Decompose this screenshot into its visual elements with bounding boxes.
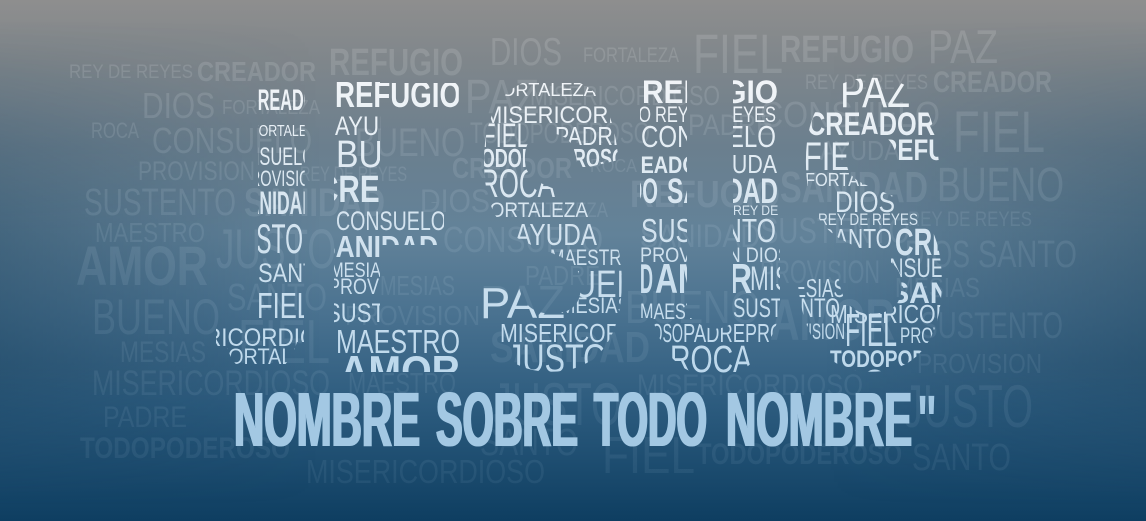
background faint word cloud: TODOPODEROSO — [697, 438, 902, 471]
second letter S words: FIEL — [803, 135, 868, 179]
background faint word cloud: BUENO — [92, 289, 220, 345]
second letter S words: FIEL — [845, 304, 897, 356]
background faint word cloud: CONSUELO — [443, 219, 603, 260]
background faint word cloud: MAESTRO — [348, 368, 456, 400]
letter U words: SUSTENTO — [733, 293, 833, 323]
JESUS letters filled with words — [216, 78, 942, 372]
background faint word cloud: REY DE REYES — [805, 71, 928, 94]
letter U words: PROVISION DIOS — [640, 244, 790, 267]
background faint word cloud: REY DE REYES — [300, 163, 407, 186]
background faint word cloud: SUSTENTO — [84, 182, 236, 224]
letter U words: CONSUELO — [641, 119, 776, 154]
title: NOMBRE SOBRE TODO NOMBRE: TODO — [594, 377, 707, 463]
background faint word cloud: MISERICORDIOSO — [637, 369, 863, 402]
second letter S words: PROVISION — [770, 319, 845, 344]
background faint word cloud: JUSTO — [492, 371, 622, 438]
letter U words: ROCA — [670, 339, 752, 381]
background faint word cloud: REY DE REYES — [908, 208, 1032, 231]
background faint word cloud: PROVISION — [138, 156, 255, 186]
title: NOMBRE SOBRE TODO NOMBRE — [234, 377, 937, 463]
background faint word cloud: DIOS — [142, 85, 215, 126]
letter U words: CONSUELO — [560, 102, 651, 127]
background faint word cloud: JUSTO — [216, 217, 336, 280]
letter S words: MAESTRO — [550, 245, 635, 270]
background faint word cloud: PROVISION — [760, 254, 880, 290]
background faint word cloud: SANTO — [480, 422, 578, 464]
letter U words: PADRE — [683, 318, 745, 348]
background faint word cloud: REFUGIO — [329, 42, 463, 84]
letter U words: SANIDAD — [667, 172, 778, 211]
background faint word cloud: AMOR — [76, 234, 208, 297]
letter S words: MISERICORDIOSO — [500, 318, 690, 348]
background faint word cloud: CREADOR — [933, 66, 1052, 99]
background faint word cloud: FIEL — [238, 308, 330, 377]
letter J words: PROVISION — [240, 166, 321, 191]
letter E words: AYUDA — [335, 111, 410, 141]
second letter S words: CONSUELO — [860, 253, 970, 283]
letter E words: REFUGIO — [335, 74, 461, 115]
letter E words: MESIAS — [330, 259, 392, 282]
letter U words: MAESTRO — [640, 299, 720, 324]
letter S words: JUSTO — [507, 337, 607, 381]
background faint word cloud: MESIAS — [120, 336, 206, 369]
letter S words: ROCA — [480, 162, 555, 206]
letter S words — [484, 83, 622, 372]
letter E words: SUSTENTO — [326, 298, 446, 328]
background faint word cloud: FIEL — [602, 427, 695, 485]
letter S words: MISERICORDIOSO — [484, 102, 679, 129]
background faint word cloud — [69, 20, 1077, 490]
letter E words: PROVISION — [328, 274, 428, 299]
letter J words: FIEL — [257, 285, 311, 326]
background faint word cloud: PROVISION — [345, 300, 480, 331]
second letter S words: CREADOR — [807, 106, 935, 142]
letter S words: FORTALEZA — [478, 199, 588, 222]
letter S words: BUENO — [553, 264, 663, 306]
title: NOMBRE SOBRE TODO NOMBRE: SOBRE — [436, 377, 578, 463]
background faint word cloud: FIEL — [693, 22, 783, 85]
second letter S words: MESIAS — [780, 273, 845, 303]
background faint word cloud: SANTO — [912, 437, 1011, 479]
background faint word cloud: CONSUELO — [760, 94, 940, 135]
background faint word cloud: CREADOR — [197, 56, 316, 87]
letter J words: CONSUELO — [223, 143, 315, 171]
background faint word cloud: SUSTENTO — [920, 305, 1063, 346]
letter U words: PROVISION — [745, 318, 845, 348]
letter S words: TODOPODEROSO — [470, 143, 626, 173]
background faint word cloud: MESIAS — [895, 272, 980, 303]
letter U words: MISERICORDIOSO — [750, 260, 950, 298]
background faint word cloud: MAESTRO — [95, 217, 205, 248]
letter U words — [640, 80, 780, 372]
letter U words: REFUGIO — [642, 74, 778, 110]
letter J words: FORTALEZA — [251, 123, 323, 140]
background faint word cloud: FORTALEZA — [583, 44, 679, 67]
second letter S words — [798, 78, 942, 372]
second letter S words: DIOS — [835, 186, 895, 219]
letter U words: AYUDA — [705, 149, 778, 179]
background faint word cloud: SANTO — [227, 277, 327, 319]
second letter S words: REFUGIO — [880, 134, 990, 167]
background faint word cloud: ROCA — [590, 156, 637, 176]
background faint word cloud: DIOS — [420, 183, 490, 219]
second letter S words: PAZ — [840, 66, 910, 117]
second letter S words: CREADOR — [895, 222, 1025, 264]
background faint word cloud: FORTALEZA — [222, 97, 321, 119]
second letter S words: FORTALEZA — [805, 170, 900, 190]
letter S words: MESIAS — [560, 293, 630, 318]
second letter S words: ROCA — [840, 362, 930, 403]
letter J words — [216, 90, 305, 364]
letter U words: CREADOR — [612, 152, 712, 179]
letter S words: AYUDA — [515, 217, 597, 252]
background faint word cloud: DIOS — [490, 31, 562, 74]
background faint word cloud: JUSTO — [903, 373, 1033, 440]
letter U words: TODO — [600, 172, 658, 211]
background faint word cloud: PROVISION — [917, 348, 1042, 379]
background faint word cloud: PADRE — [525, 260, 600, 291]
background faint word cloud: AMOR — [770, 288, 895, 353]
letter E words: CONSUELO — [336, 206, 446, 236]
background faint word cloud: SANIDAD — [244, 181, 385, 225]
background faint word cloud: REFUGIO — [630, 174, 780, 216]
letter J words: FORTALEZA — [216, 344, 331, 369]
title: NOMBRE SOBRE TODO NOMBRE: NOMBRE — [234, 377, 420, 463]
background faint word cloud: AYUDA — [820, 135, 900, 166]
letter E words: BUENO — [336, 134, 456, 176]
letter J words: JUSTO — [228, 215, 303, 262]
letter U words: AMOR — [655, 255, 752, 302]
second letter S words: TODOPODEROSO — [830, 346, 995, 373]
letter S words: FIEL — [482, 117, 529, 155]
background faint word cloud: PADRE — [688, 109, 773, 142]
background faint word cloud: REFUGIO — [780, 29, 914, 71]
background faint word cloud: MISERICORDIOSO — [530, 80, 720, 111]
letter U words: SUSTENTO — [641, 212, 776, 249]
letter U words: SANIDAD — [570, 255, 653, 302]
background faint word cloud: FIEL — [953, 100, 1045, 165]
second letter S words: MISERICORDIOSO — [830, 299, 1020, 329]
second letter S words: SANTO — [890, 277, 990, 310]
title: NOMBRE SOBRE TODO NOMBRE: NOMBRE — [726, 377, 912, 463]
second letter S words: PROVISION — [900, 323, 985, 348]
letter S words: PAZ — [480, 279, 565, 328]
background faint word cloud: TODOPODEROSO — [80, 432, 290, 465]
letter J words: SANIDAD — [235, 185, 315, 221]
background faint word cloud: DIOS — [905, 234, 970, 276]
second letter S words: SANTO — [775, 293, 840, 323]
letter U words: REY DE REYES — [733, 202, 823, 218]
background faint word cloud: SANIDAD — [490, 323, 650, 372]
background faint word cloud: CREADOR — [452, 153, 572, 185]
letter S words: PADRE — [555, 121, 627, 151]
background faint word cloud: MESIAS — [380, 270, 455, 301]
background faint word cloud: MISERICORDIOSO — [306, 453, 545, 490]
background faint word cloud: CONSUELO — [152, 120, 312, 161]
background faint word cloud: REY DE REYES — [69, 62, 193, 83]
background faint word cloud: SANIDAD — [640, 218, 760, 254]
letter J words: SANTO — [258, 258, 333, 288]
letter E words: MAESTRO — [336, 323, 460, 360]
letter E words — [334, 82, 459, 372]
background faint word cloud: BUENO — [355, 121, 465, 165]
background faint word cloud: PAZ — [480, 276, 565, 328]
letter E words: SANIDAD — [318, 229, 438, 264]
background faint word cloud: SUSTENTO — [760, 210, 910, 251]
letter S words: FORTALEZA — [490, 80, 596, 100]
background faint word cloud: PADRE — [103, 401, 187, 434]
background faint word cloud: BUENO — [625, 281, 760, 333]
letter J words: CREADOR — [246, 84, 328, 117]
title: NOMBRE SOBRE TODO NOMBRE: " — [917, 382, 937, 462]
letter E words: CREADOR — [317, 169, 467, 211]
letter E words: AMOR — [340, 347, 460, 394]
second letter S words: SANTO — [820, 223, 892, 254]
background faint word cloud: BUENO — [937, 159, 1064, 212]
background faint word cloud: TODOPODEROSO — [470, 117, 650, 150]
letter J words: MISERICORDIOSO — [150, 324, 350, 352]
second letter S words: REY DE REYES — [818, 210, 918, 229]
background faint word cloud: SANTO — [978, 234, 1077, 276]
background faint word cloud: PAZ — [928, 20, 998, 73]
letter U words: TODOPODEROSO — [560, 318, 683, 348]
background faint word cloud: PAZ — [465, 71, 539, 124]
background faint word cloud: MISERICORDIOSO — [92, 364, 330, 403]
background faint word cloud: SANIDAD — [780, 163, 928, 212]
background faint word cloud: ROCA — [91, 118, 139, 143]
background faint word cloud: FORTALEZA — [510, 199, 608, 222]
letter U words: REY DE REYES — [655, 102, 776, 127]
